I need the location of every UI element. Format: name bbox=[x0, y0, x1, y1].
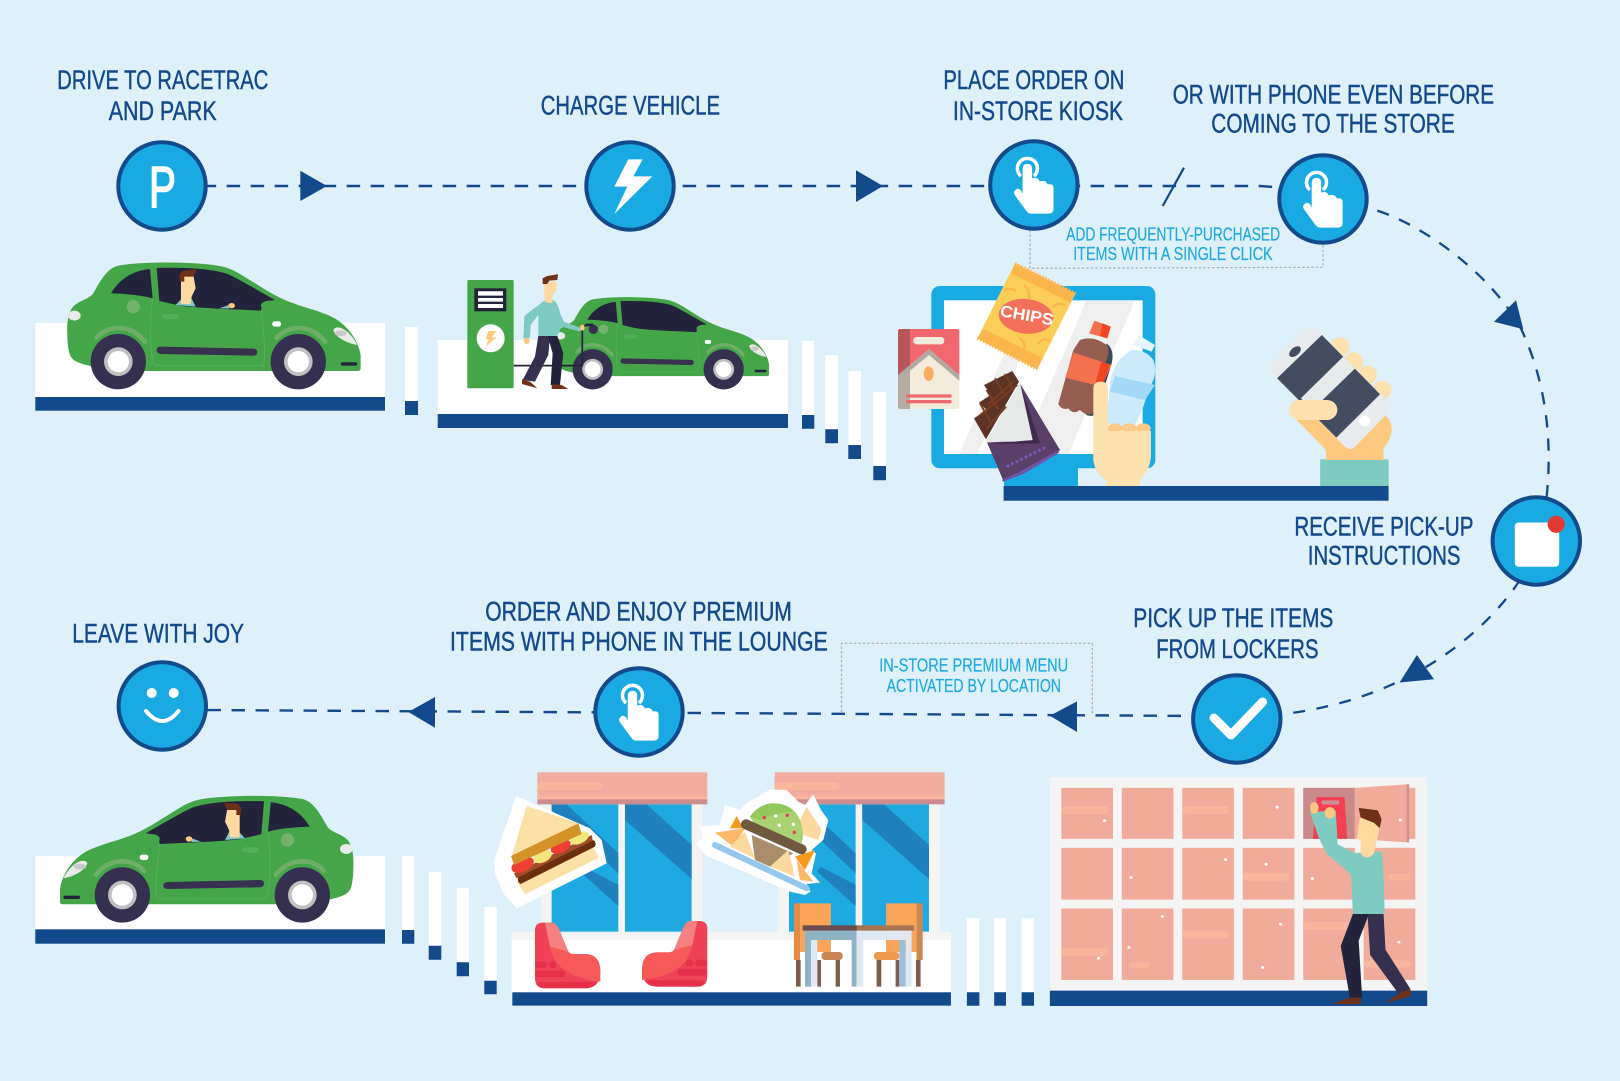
dashed path: instructions to lockers bbox=[1284, 580, 1520, 714]
step 1: drive and park bbox=[35, 65, 418, 415]
cable and plug bbox=[514, 325, 598, 366]
chocolate bar bbox=[974, 371, 1060, 482]
car charging bbox=[555, 297, 769, 389]
dotted bracket: kiosk and phone bbox=[1030, 230, 1323, 268]
note: premium menu: IN-STORE PREMIUM MENU bbox=[879, 654, 1068, 675]
charger station bbox=[467, 280, 514, 388]
floor bbox=[512, 932, 951, 1006]
arrow: to lockers bbox=[1400, 655, 1434, 682]
icon: tap kiosk bbox=[990, 141, 1078, 229]
slash divider between kiosk and phone bbox=[1163, 168, 1184, 206]
arrow: to instructions bbox=[1494, 300, 1523, 329]
icon: parking bbox=[118, 142, 206, 230]
icon: check mark bbox=[1193, 675, 1281, 763]
icon: parking: P bbox=[149, 155, 176, 220]
charging scene bbox=[467, 274, 769, 389]
monitor bbox=[931, 286, 1155, 487]
heading: drive to racetrac: DRIVE TO RACETRAC bbox=[57, 65, 268, 95]
table and chairs bbox=[794, 903, 923, 987]
arrow: to leave bbox=[408, 697, 435, 728]
icon: notification bbox=[1493, 497, 1580, 585]
step 3b: order with phone bbox=[1004, 79, 1494, 501]
heading: lockers: FROM LOCKERS bbox=[1156, 634, 1318, 664]
icon: tap phone bbox=[1279, 155, 1367, 243]
heading: lounge: ITEMS WITH PHONE IN THE LOUNGE bbox=[450, 627, 828, 657]
icon: smile bbox=[119, 662, 206, 750]
stepped bars bbox=[802, 341, 886, 480]
open locker with red bag bbox=[1303, 784, 1409, 842]
heading: phone: OR WITH PHONE EVEN BEFORE bbox=[1173, 79, 1494, 109]
red lounge chairs bbox=[535, 921, 707, 988]
car leaving with driver bbox=[60, 796, 353, 923]
arrow: to lounge bbox=[1050, 701, 1077, 732]
step 2: charge vehicle bbox=[438, 91, 886, 480]
man reaching bbox=[1310, 802, 1411, 1004]
note: premium menu: ACTIVATED BY LOCATION bbox=[887, 675, 1061, 696]
lounge scene bbox=[494, 772, 951, 1006]
dashed path: lockers to leave bbox=[203, 710, 1201, 716]
cigarette box bbox=[898, 329, 959, 409]
step 3: place order on kiosk bbox=[898, 65, 1155, 487]
platform bbox=[438, 340, 788, 428]
icon: lightning bolt bbox=[586, 142, 674, 230]
chips bag: CHIPS bbox=[999, 302, 1055, 329]
step 5: pick up from lockers bbox=[967, 603, 1427, 1006]
kiosk scene bbox=[898, 263, 1155, 487]
heading: kiosk: PLACE ORDER ON bbox=[943, 65, 1124, 95]
note: frequently purchased: ADD FREQUENTLY-PURCHASED bbox=[1066, 223, 1280, 244]
icon: tap lounge bbox=[595, 668, 683, 756]
stepped bars bbox=[402, 856, 497, 994]
step 6: order premium items in lounge bbox=[402, 597, 1068, 1006]
heading: kiosk: IN-STORE KIOSK bbox=[953, 96, 1123, 126]
heading: instructions: INSTRUCTIONS bbox=[1308, 541, 1460, 571]
heading: drive to racetrac: AND PARK bbox=[109, 96, 217, 126]
note: frequently purchased: ITEMS WITH A SINGLE CLICK bbox=[1073, 243, 1273, 264]
nachos sticker bbox=[697, 789, 828, 895]
locker scene bbox=[1050, 777, 1427, 1006]
platform bbox=[35, 323, 385, 411]
water bottle bbox=[1107, 335, 1155, 430]
heading: instructions: RECEIVE PICK-UP bbox=[1294, 511, 1473, 541]
hand pointing bbox=[1093, 382, 1151, 486]
heading: lockers: PICK UP THE ITEMS bbox=[1133, 603, 1333, 633]
step 4: receive pick-up instructions bbox=[1294, 497, 1580, 585]
dashed path: phone to pick-up instructions bbox=[1377, 211, 1549, 497]
car with driver bbox=[67, 263, 361, 389]
heading: lounge: ORDER AND ENJOY PREMIUM bbox=[485, 597, 792, 627]
sandwich sticker bbox=[494, 796, 607, 908]
base bar bbox=[1004, 486, 1389, 501]
stepped bars bbox=[967, 918, 1034, 1006]
windows bbox=[537, 772, 945, 932]
step 7: leave with joy bbox=[35, 619, 385, 944]
heading: charge vehicle: CHARGE VEHICLE bbox=[541, 91, 720, 121]
man plugging in bbox=[522, 274, 585, 389]
small bar bbox=[405, 327, 418, 415]
dashed path: park to phone bbox=[203, 186, 1273, 187]
arrow: to kiosk bbox=[856, 170, 883, 202]
chips bag bbox=[977, 263, 1076, 369]
arrow: to charge bbox=[300, 171, 327, 201]
cola bottle bbox=[1058, 321, 1113, 416]
dotted bracket: premium menu bbox=[842, 643, 1092, 714]
platform bbox=[35, 856, 385, 944]
hand holding phone bbox=[1269, 326, 1392, 487]
heading: phone: COMING TO THE STORE bbox=[1211, 109, 1455, 139]
heading: leave with joy: LEAVE WITH JOY bbox=[72, 619, 244, 649]
locker wall bbox=[1050, 777, 1427, 1006]
